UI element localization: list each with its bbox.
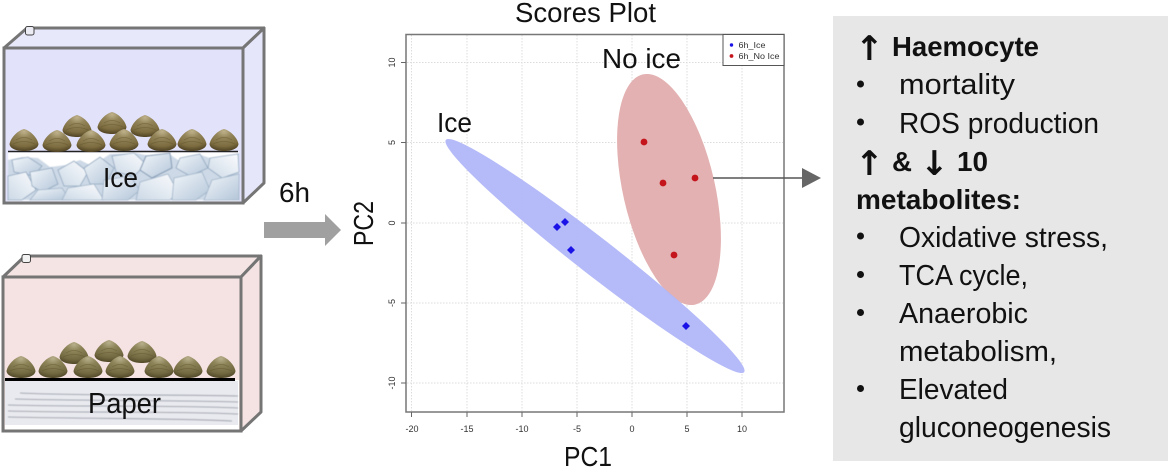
x axis ticks and labels: 0	[629, 424, 635, 434]
box front outline	[3, 277, 241, 431]
box top face	[3, 256, 261, 277]
arrow: 6h to plot	[264, 214, 341, 246]
list: haemocyte effects	[857, 69, 1099, 140]
list: haemocyte effects: mortality	[899, 69, 1016, 101]
x axis ticks and labels: -10	[515, 424, 529, 434]
box handle	[26, 26, 34, 35]
shelf line	[8, 150, 238, 152]
heading: metabolites: metabolites:	[856, 184, 1021, 215]
shelf line	[5, 378, 235, 381]
label: No ice: No ice	[602, 43, 681, 74]
clams on paper	[6, 340, 236, 378]
heading: haemocyte	[855, 29, 1039, 69]
paper layer	[5, 380, 239, 430]
x axis ticks and labels: -20	[405, 424, 419, 434]
ice data points	[553, 218, 690, 330]
y axis ticks and labels: 5	[387, 140, 397, 145]
label: Ice: Ice	[103, 162, 138, 193]
panel: paper box	[3, 254, 261, 431]
heading: haemocyte: ↑	[855, 29, 884, 69]
legend	[723, 34, 784, 66]
arrow: no ice to results	[713, 168, 821, 188]
list: metabolite effects: Oxidative stress,	[899, 222, 1108, 254]
panel background	[833, 16, 1168, 461]
box front outline	[4, 48, 243, 203]
box handle	[22, 254, 30, 262]
x axis ticks and labels: 10	[737, 424, 747, 434]
chart: PCA scores plot	[387, 34, 784, 434]
x axis ticks and labels: -15	[460, 424, 474, 434]
label: Ice: Ice	[437, 107, 472, 138]
list: metabolite effects	[857, 222, 1111, 444]
panel: ice box	[4, 26, 264, 203]
y axis ticks and labels: 0	[387, 220, 397, 226]
box side face	[243, 28, 264, 203]
box top face	[4, 28, 264, 48]
ellipse: ice group	[434, 125, 756, 387]
panel: results	[833, 16, 1168, 461]
y axis ticks and labels: 10	[387, 57, 397, 68]
ellipse: no ice group	[598, 64, 740, 315]
ice layer	[8, 152, 239, 201]
no ice data points	[641, 139, 698, 258]
legend: 6h_No Ice	[738, 52, 780, 61]
box front face	[3, 277, 241, 431]
heading: metabolites	[855, 144, 1021, 215]
label: Paper: Paper	[88, 388, 161, 420]
x axis ticks and labels: 5	[684, 424, 690, 434]
list: metabolite effects: Elevated	[899, 374, 1008, 406]
heading: metabolites: ↓	[920, 144, 948, 184]
y axis ticks and labels: -5	[387, 299, 397, 307]
list: haemocyte effects: ROS production	[899, 108, 1099, 140]
y axis ticks and labels	[387, 57, 406, 390]
grid lines	[407, 35, 783, 411]
plot border	[406, 34, 784, 412]
y axis title: PC2: PC2	[348, 201, 379, 246]
legend: 6h_Ice	[738, 41, 766, 50]
y axis ticks and labels: -10	[387, 376, 397, 390]
box front face	[4, 48, 243, 203]
label: 6h: 6h	[279, 177, 310, 208]
heading: metabolites: ↑	[855, 144, 884, 184]
box side face	[241, 256, 261, 431]
list: metabolite effects: TCA cycle,	[899, 260, 1028, 292]
heading: haemocyte: Haemocyte	[892, 31, 1039, 62]
clams on ice	[10, 112, 238, 152]
heading: metabolites: 10	[957, 146, 988, 177]
list: metabolite effects: metabolism,	[899, 336, 1057, 368]
list: metabolite effects: gluconeogenesis	[899, 412, 1111, 444]
x axis ticks and labels	[405, 412, 747, 434]
heading: metabolites: &	[892, 146, 912, 177]
x axis ticks and labels: -5	[573, 424, 581, 434]
list: metabolite effects: Anaerobic	[899, 298, 1028, 330]
